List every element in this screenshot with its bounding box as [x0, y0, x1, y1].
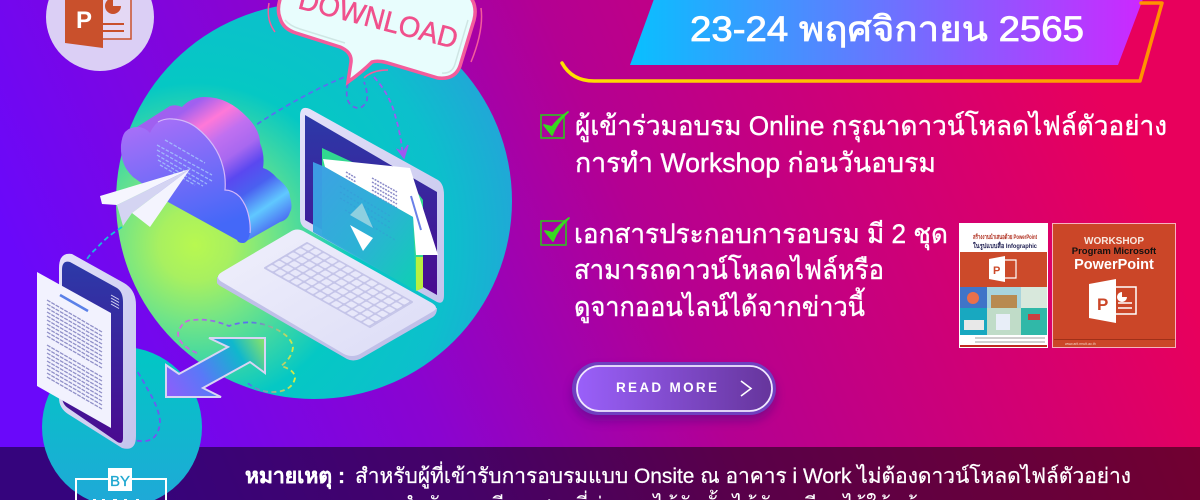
read more button: READ MORE [616, 380, 717, 395]
small teal circle [42, 347, 202, 500]
book cover: workshop: WORKSHOP [1084, 236, 1144, 247]
text block: ดูจากออนไลน์ได้จากข่าวนี้ [574, 287, 865, 323]
folder with documents [313, 148, 438, 291]
book cover: infographic: ในรูปแบบสื่อ Infographic [973, 240, 1037, 251]
book cover: workshop [1052, 224, 1176, 348]
dashed connector paths [83, 76, 403, 441]
read more button [572, 362, 776, 421]
icon: laptop [217, 108, 444, 360]
yellow-orange underline frame [562, 3, 1162, 81]
text block: การทำ Workshop ก่อนวันอบรม [575, 148, 936, 178]
book cover: infographic: สร้างงานนำเสนอด้วย PowerPoint [973, 232, 1038, 241]
icon: PowerPoint badge: P [76, 7, 92, 34]
icon: green check box [541, 112, 568, 138]
document sheet [37, 272, 111, 428]
book cover: workshop: Program Microsoft [1072, 246, 1157, 257]
bullet: online participants [541, 110, 1175, 178]
icon: isometric cloud [121, 97, 292, 243]
book cover: workshop: PowerPoint [1074, 257, 1154, 273]
date banner: 23-24 พฤศจิกายน 2565 [690, 10, 1084, 49]
laptop dark screen [305, 115, 437, 295]
text block: เอกสารประกอบการอบรม มี 2 ชุด [574, 219, 948, 251]
icon: double-headed arrow [166, 338, 265, 397]
icon: smartphone with document [37, 254, 136, 449]
book cover: workshop: www.arit.rmutt.ac.th [1065, 342, 1096, 346]
footer note [245, 461, 1131, 500]
bullet: training documents [541, 218, 956, 323]
footer note: สำหรับผู้ที่เข้ารับการอบรมแบบ Onsite ณ อาคาร i Work ไม่ต้องดาวน์โหลดไฟล์ตัวอย่าง [355, 461, 1131, 489]
icon: paper plane [100, 169, 190, 227]
icon: PowerPoint badge [46, 0, 154, 71]
book cover: infographic [959, 223, 1048, 348]
book cover: workshop: P [1097, 295, 1108, 314]
date banner [630, 0, 1143, 65]
speech bubble: download [268, 0, 482, 82]
book cover: infographic: P [993, 265, 1000, 277]
footer band [0, 447, 1200, 500]
footer note: หมายเหตุ : [245, 465, 345, 490]
text block: สามารถดาวน์โหลดไฟล์หรือ [574, 254, 884, 285]
logo: by badge: BY [110, 473, 130, 490]
logo: by badge [76, 468, 166, 500]
icon: arrow head into laptop [398, 145, 408, 158]
icon: green check box [541, 218, 569, 245]
text block: ผู้เข้าร่วมอบรม Online กรุณาดาวน์โหลดไฟล์ตัวอย่าง [575, 110, 1167, 143]
laptop base [217, 230, 437, 360]
large teal-green circle [116, 3, 512, 399]
laptop screen frame [300, 108, 444, 303]
